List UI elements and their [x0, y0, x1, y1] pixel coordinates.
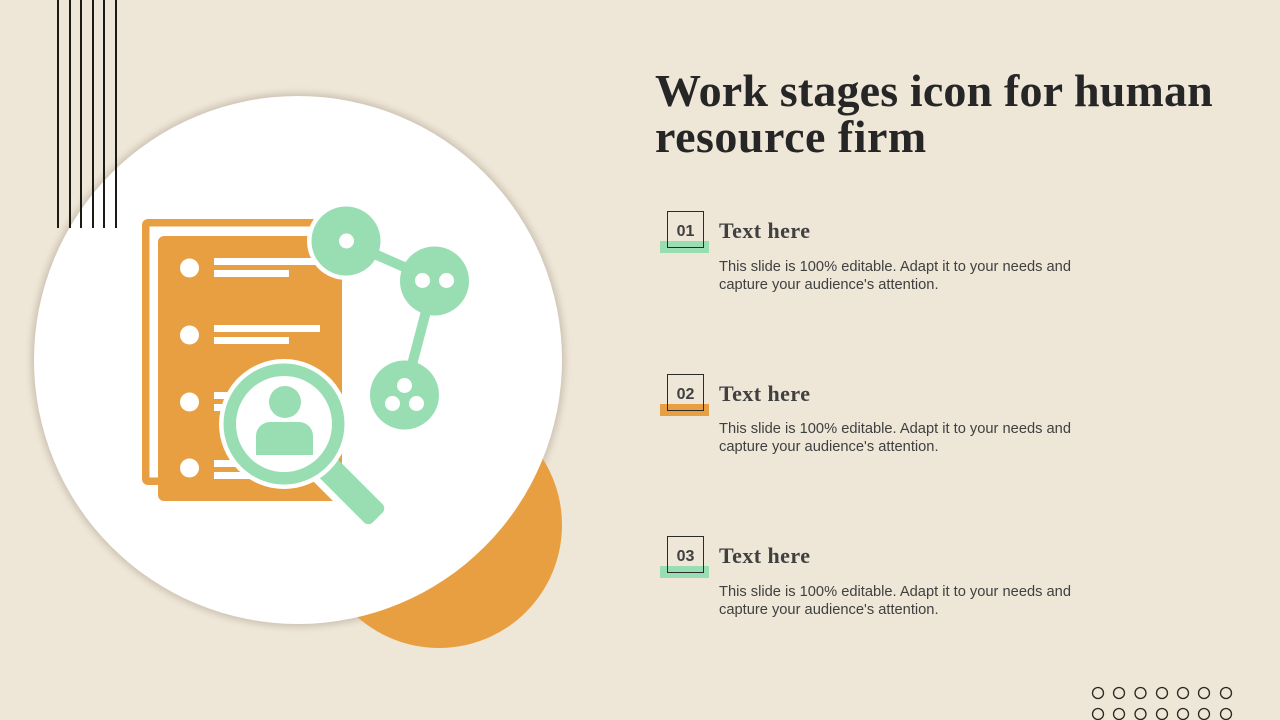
item 02: capture your audience's attention. — [719, 439, 939, 455]
item 01 — [660, 211, 1071, 293]
icon: document with magnifier and network — [142, 202, 469, 527]
network node 3 — [370, 360, 439, 430]
dot grid decoration — [1092, 688, 1232, 720]
item 03: This slide is 100% editable. Adapt it to your needs and — [719, 584, 1071, 600]
network node 2 — [400, 246, 469, 316]
item 02: 02 — [677, 386, 694, 403]
back document — [142, 219, 340, 485]
person — [256, 386, 313, 455]
vertical lines decoration — [58, 0, 116, 228]
item 01: This slide is 100% editable. Adapt it to your needs and — [719, 259, 1071, 275]
item 03: Text here — [719, 543, 810, 568]
item 02: Text here — [719, 381, 810, 406]
item 02 — [660, 374, 1071, 455]
item 01: Text here — [719, 218, 810, 243]
title: resource firm — [655, 111, 927, 162]
item 03: 03 — [677, 548, 694, 565]
front document — [158, 236, 342, 501]
title: Work stages icon for human — [655, 65, 1213, 116]
item 03: capture your audience's attention. — [719, 602, 939, 618]
white circle panel — [34, 96, 562, 624]
network connectors — [404, 281, 434, 395]
item 03 — [660, 536, 1071, 618]
item 01: 01 — [677, 223, 694, 240]
white circle shadow — [31, 93, 565, 627]
title — [655, 65, 1213, 162]
network node 1 — [307, 202, 420, 280]
magnifying glass — [219, 359, 387, 527]
item 01: capture your audience's attention. — [719, 277, 939, 293]
item 02: This slide is 100% editable. Adapt it to your needs and — [719, 421, 1071, 437]
orange accent circle — [316, 402, 562, 648]
